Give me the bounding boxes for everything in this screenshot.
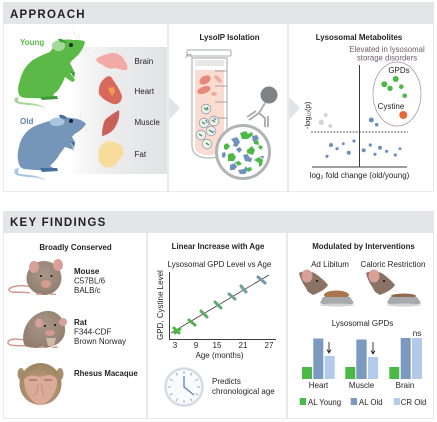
- legend: AL Old: [359, 398, 383, 407]
- label: Muscle: Muscle: [134, 118, 160, 127]
- bar labels: [309, 381, 414, 390]
- heading: Modulated by Interventions: Modulated by Interventions: [312, 242, 415, 251]
- text: predicts chronological age: chronological age: [212, 387, 275, 396]
- icon: rat: [8, 311, 67, 348]
- label: Ad Libitum: Ad Libitum: [311, 260, 349, 269]
- icon: magnified metabolites: [216, 126, 270, 178]
- text: mouse strains: BALB/c: [74, 286, 101, 295]
- icon: caloric restriction mouse and bowl: [366, 270, 421, 306]
- text: mouse strains: Mouse: [74, 267, 100, 276]
- x axis label: log₂ fold change (old/young): [310, 171, 410, 180]
- text: rat strains: F344-CDF: [74, 328, 111, 336]
- x tick labels: 27: [265, 341, 274, 350]
- heading: Broadly Conserved: Broadly Conserved: [39, 243, 112, 252]
- heading: Lysosomal Metabolites: Lysosomal Metabolites: [316, 33, 403, 42]
- muscle bars: [345, 340, 378, 379]
- text: rat strains: Rat: [74, 318, 87, 327]
- icon: old mouse: [14, 112, 88, 180]
- label: Young: Young: [20, 38, 44, 47]
- text: mouse strains: C57BL/6: [74, 276, 106, 286]
- brain bars: [389, 338, 422, 379]
- label: Brain: Brain: [134, 57, 153, 66]
- icon: fat: [98, 141, 123, 168]
- label: ns: ns: [413, 329, 421, 338]
- x tick labels: 15: [213, 341, 222, 350]
- bar chart: [302, 329, 422, 390]
- icon: test tube: [186, 50, 231, 158]
- chart title: Lysosomal GPDs: Lysosomal GPDs: [332, 319, 393, 328]
- organ backdrop band: [68, 47, 167, 174]
- icon: antibody bead: [247, 86, 278, 127]
- panel: approach section: [3, 2, 434, 192]
- bar labels: Brain: [396, 381, 414, 390]
- x tick labels: [173, 341, 274, 350]
- chart title: Lysosomal GPD Level vs Age: [168, 260, 272, 269]
- label: GPDs: GPDs: [388, 66, 410, 75]
- icon: brain: [96, 53, 127, 70]
- heading: LysoIP Isolation: LysoIP Isolation: [199, 33, 260, 42]
- icon: mouse: [9, 259, 63, 295]
- panel: key findings section: [3, 211, 434, 419]
- x axis label: Age (months): [195, 351, 244, 360]
- heading: Linear Increase with Age: Linear Increase with Age: [172, 242, 265, 251]
- label: Heart: Heart: [134, 87, 155, 96]
- y axis label: -log₁₀(p): [303, 101, 312, 129]
- x tick labels: 21: [239, 341, 248, 350]
- text: rat strains: Brown Norway: [74, 337, 126, 346]
- icon: clock: [166, 368, 202, 406]
- icon: ad libitum mouse and bowl: [299, 270, 354, 306]
- label: Old: Old: [20, 117, 33, 126]
- volcano plot: [303, 62, 421, 180]
- heading: approach: APPROACH: [10, 9, 86, 21]
- text: predicts chronological age: Predicts: [212, 377, 241, 386]
- x tick labels: 3: [173, 341, 178, 350]
- text: Rhesus Macaque: Rhesus Macaque: [74, 369, 138, 378]
- heart bars: [302, 338, 335, 379]
- label: Cystine: Cystine: [378, 102, 405, 111]
- arrow: heart decrease: [327, 342, 331, 353]
- bar labels: Muscle: [349, 381, 375, 390]
- legend: [300, 398, 426, 407]
- icon: heart: [99, 76, 122, 104]
- caption: elevated in lysosomal storage disorders: storage disorders: [357, 54, 417, 62]
- arrow: to metabolites: [289, 97, 300, 120]
- y axis label: GPD, Cystine Level: [156, 270, 165, 340]
- label: Caloric Restriction: Caloric Restriction: [361, 260, 425, 269]
- icon: young mouse: [14, 31, 89, 108]
- legend: AL Young: [308, 398, 341, 407]
- bar labels: Heart: [309, 381, 329, 390]
- legend: CR Old: [401, 398, 426, 407]
- heading: key findings: KEY FINDINGS: [10, 217, 107, 229]
- label: Fat: Fat: [134, 150, 147, 159]
- arrow: to LysoIP: [169, 97, 180, 120]
- scatter chart: GPD vs age: [156, 270, 276, 360]
- x tick labels: 9: [194, 341, 199, 350]
- caption: elevated in lysosomal storage disorders: Elevated in lysosomal: [349, 45, 425, 54]
- arrow: muscle decrease: [371, 342, 375, 354]
- icon: muscle: [102, 110, 119, 136]
- icon: rhesus macaque: [18, 363, 64, 405]
